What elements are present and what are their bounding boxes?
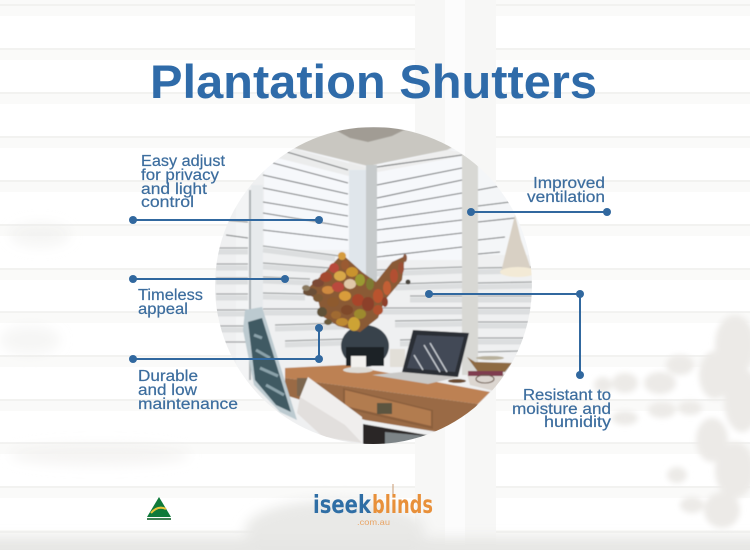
label text: improved ventilation: ventilation xyxy=(527,189,605,206)
books and bowl xyxy=(448,356,512,392)
window shutters backdrop xyxy=(210,120,540,450)
callout: resistant to moisture xyxy=(425,290,611,431)
white pillows xyxy=(297,377,362,443)
label text: easy adjust: and light xyxy=(141,181,208,198)
pendant lamp xyxy=(500,216,532,277)
label text: easy adjust: Easy adjust xyxy=(141,153,226,170)
callout: timeless appeal xyxy=(129,275,289,318)
leader line: easy adjust xyxy=(129,216,323,224)
title: Plantation Shutters xyxy=(150,55,597,108)
autumn plant xyxy=(302,252,410,332)
label text: timeless appeal: Timeless xyxy=(138,287,203,304)
label text: improved ventilation: Improved xyxy=(533,175,605,192)
shutter louvres xyxy=(222,152,515,257)
photo circle: desk in front of shutters xyxy=(210,120,540,450)
label text: easy adjust: for privacy xyxy=(141,167,219,184)
label text: resistant: Resistant to xyxy=(523,387,611,404)
label text: resistant: moisture and xyxy=(512,401,611,418)
label text: durable: Durable xyxy=(138,368,198,385)
leader line: durable xyxy=(129,324,323,363)
label text: durable: maintenance xyxy=(138,396,238,413)
logo: iseekblinds: .com.au xyxy=(357,518,390,527)
leader line: resistant xyxy=(425,290,584,379)
callout: easy adjust xyxy=(129,153,323,224)
callout: improved ventilation xyxy=(467,175,611,216)
logo: iseekblinds: iseek xyxy=(313,490,372,519)
callout: durable and low maintenance xyxy=(129,324,323,413)
label text: durable: and low xyxy=(138,382,198,399)
leader line: timeless appeal xyxy=(129,275,289,283)
label text: easy adjust: control xyxy=(141,194,194,211)
chair cushion xyxy=(243,307,297,420)
background: faded maple branch xyxy=(594,315,750,528)
vase, cups and saucer xyxy=(341,325,405,373)
logo: iseekblinds xyxy=(313,484,433,527)
logo: iseekblinds: blinds xyxy=(372,490,433,519)
icon: Australian Made badge xyxy=(147,497,171,520)
label text: resistant: humidity xyxy=(544,414,611,431)
label text: timeless appeal: appeal xyxy=(138,301,188,318)
wooden desk xyxy=(285,365,490,446)
leader line: ventilation xyxy=(467,208,611,216)
laptop xyxy=(372,330,469,384)
